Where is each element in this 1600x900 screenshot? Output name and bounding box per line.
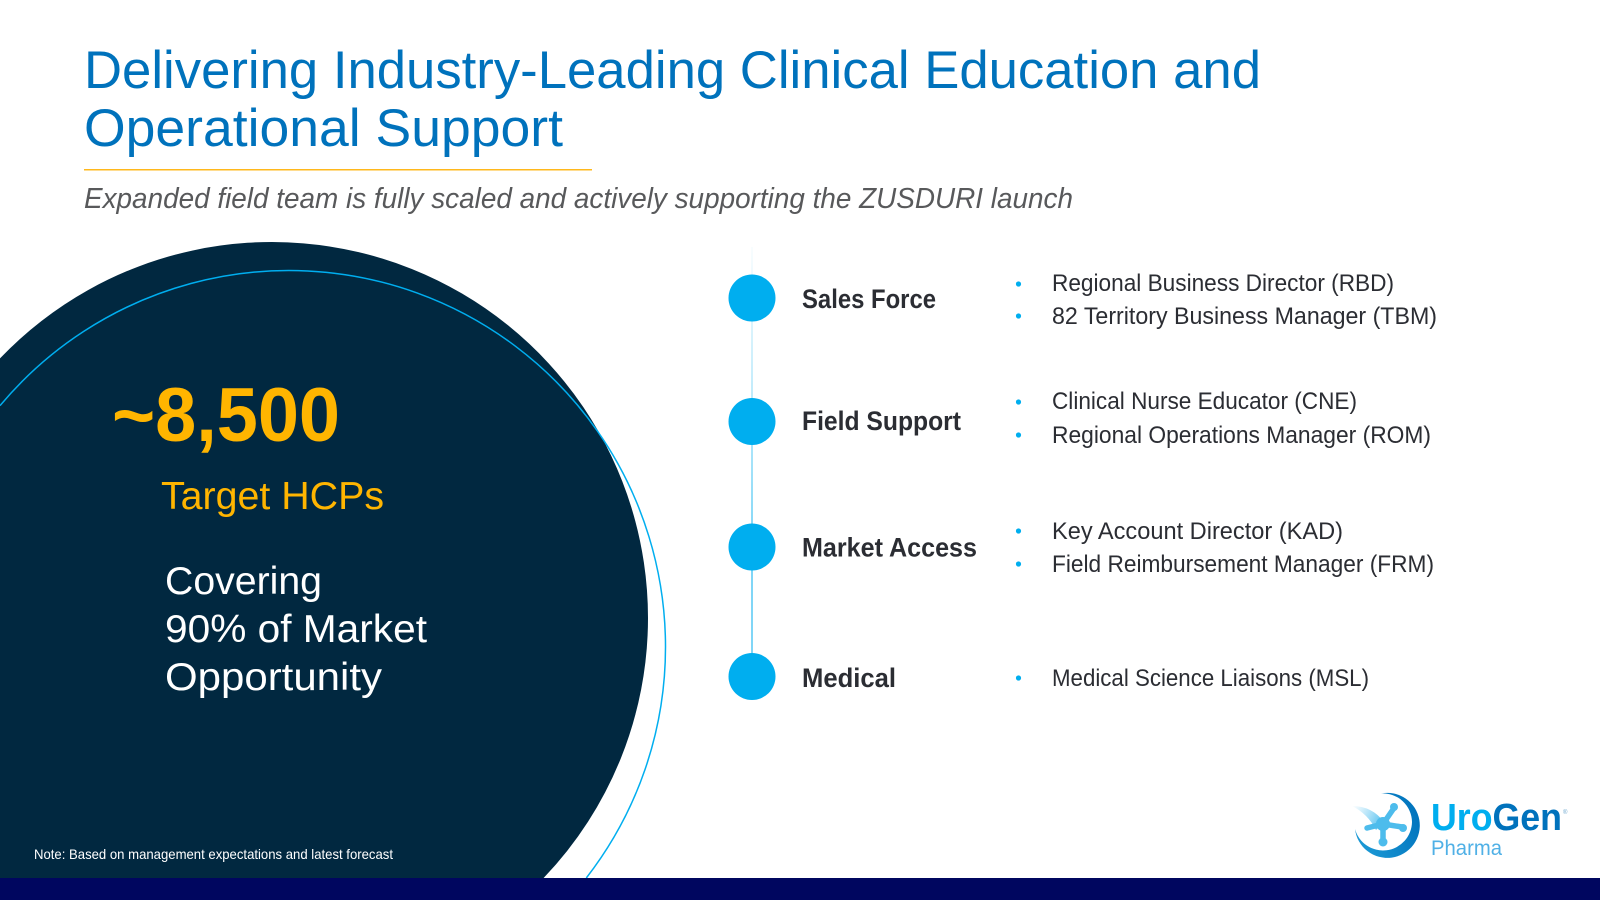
roles: Field Reimbursement Manager (FRM) <box>1052 551 1434 578</box>
title: Delivering Industry-Leading Clinical Education and <box>84 41 1261 100</box>
row: Market Access <box>728 518 1434 578</box>
title <box>84 41 1261 158</box>
coverage text: Covering <box>165 560 322 603</box>
label: Market Access <box>802 532 977 562</box>
dark circle <box>0 242 648 878</box>
footnote: Note: Based on management expectations and latest forecast <box>34 846 393 862</box>
label: Field Support <box>802 406 961 436</box>
coverage text: Opportunity <box>165 656 383 699</box>
cyan outline circle <box>0 271 666 878</box>
timeline node <box>728 274 776 322</box>
roles: Clinical Nurse Educator (CNE) <box>1052 388 1357 415</box>
roles <box>1016 518 1434 578</box>
label: Medical <box>802 663 896 693</box>
title underline <box>84 169 592 170</box>
roles <box>1016 388 1431 449</box>
panel: market coverage circle <box>0 242 666 878</box>
row: Sales Force <box>728 270 1437 330</box>
icon: ring and molecule <box>1352 793 1420 858</box>
roles: Regional Business Director (RBD) <box>1052 270 1394 297</box>
roles: Medical Science Liaisons (MSL) <box>1052 665 1369 692</box>
target HCPs label: Target HCPs <box>161 475 384 518</box>
subtitle: Expanded field team is fully scaled and actively supporting the ZUSDURI launch <box>84 183 1073 215</box>
coverage text <box>165 560 427 699</box>
timeline node <box>728 653 776 700</box>
roles: 82 Territory Business Manager (TBM) <box>1052 303 1437 330</box>
row: Medical <box>728 653 1369 700</box>
timeline connector <box>752 247 753 676</box>
Pharma: Pharma <box>1431 837 1502 860</box>
title: Operational Support <box>84 99 563 158</box>
roles: Key Account Director (KAD) <box>1052 518 1343 545</box>
footer bar <box>0 878 1600 900</box>
timeline node <box>728 398 776 445</box>
row: Field Support <box>728 388 1431 449</box>
big number: ~8,500 <box>112 373 340 458</box>
roles: Regional Operations Manager (ROM) <box>1052 422 1431 449</box>
logo: UroGen Pharma <box>1352 793 1568 860</box>
timeline node <box>728 524 776 570</box>
roles <box>1016 270 1437 330</box>
coverage text: 90% of Market <box>165 608 427 651</box>
wordmark: UroGen <box>1431 797 1562 839</box>
registered mark: ® <box>1563 809 1568 816</box>
label: Sales Force <box>802 284 936 314</box>
